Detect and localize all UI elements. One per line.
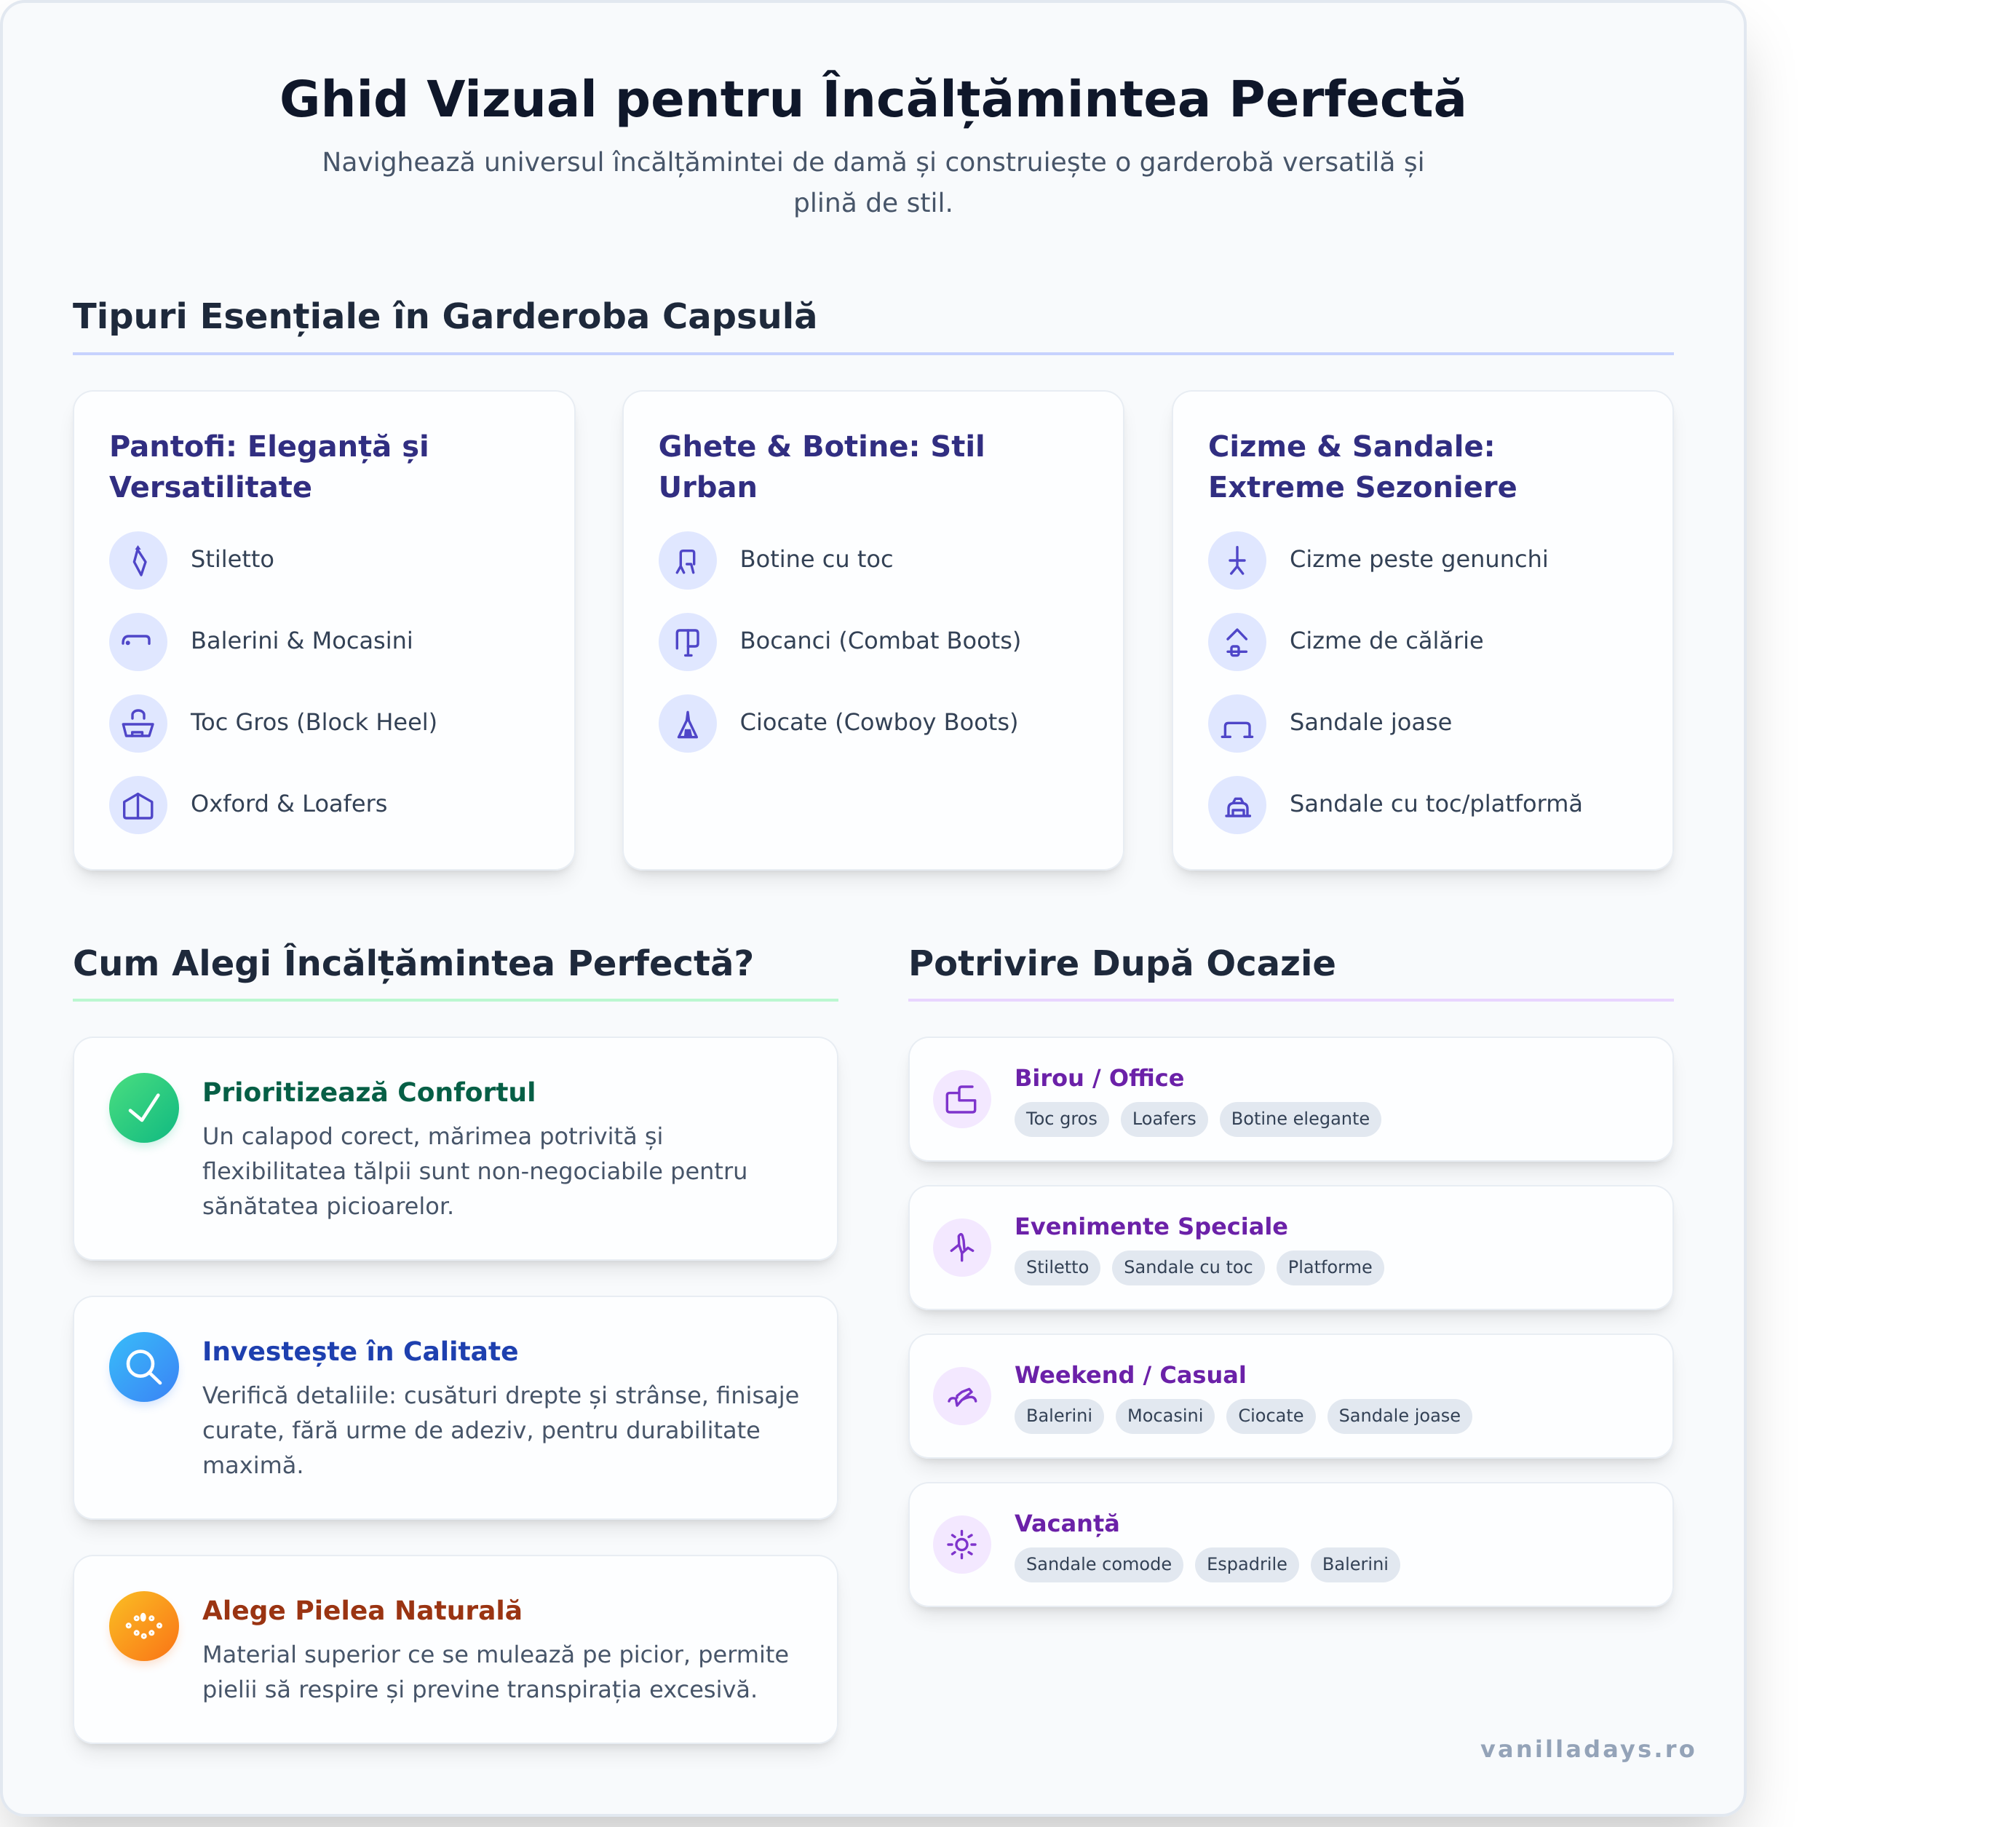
tags: Sandale comode: [1026, 1554, 1172, 1574]
tags: Loafers: [1132, 1109, 1196, 1129]
subtitle: plină de stil.: [793, 189, 953, 218]
tags: Espadrile: [1207, 1554, 1287, 1574]
tags: Sandale joase: [1339, 1406, 1461, 1426]
tags: Toc gros: [1026, 1109, 1098, 1129]
occasion heading: Weekend / Casual: [1015, 1361, 1247, 1389]
panel: ghete: [622, 390, 1124, 871]
icon: briefcase: [933, 1070, 991, 1128]
icon: sun: [933, 1515, 991, 1574]
tags: [1015, 1102, 1381, 1137]
tip text: maximă.: [202, 1451, 304, 1479]
list item: flat sandals: Sandale joase: [1290, 708, 1452, 736]
card heading: Pantofi: Eleganță și: [109, 430, 429, 464]
heading: essential types: Tipuri Esențiale în Garderoba Capsulă: [73, 296, 818, 337]
tags: Balerini: [1322, 1554, 1389, 1574]
footer: site name: vanilladays.ro: [1480, 1735, 1697, 1763]
tags: Botine elegante: [1231, 1109, 1370, 1129]
panel: office: [908, 1037, 1674, 1162]
list item: cowboy boots: Ciocate (Cowboy Boots): [740, 708, 1018, 736]
title: Ghid Vizual pentru Încălțămintea Perfectă: [279, 71, 1467, 129]
panel: vacation: [908, 1482, 1674, 1607]
tip heading: Investește în Calitate: [202, 1337, 519, 1367]
tip text: [202, 1382, 799, 1479]
icon: heeled shoe: [933, 1218, 991, 1277]
panel: comfort tip: [73, 1037, 838, 1261]
list item: oxford: Oxford & Loafers: [191, 790, 387, 817]
tip text: Un calapod corect, mărimea potrivită și: [202, 1122, 663, 1150]
card heading: Ghete & Botine: Stil: [659, 430, 985, 464]
icon: magnifier: [109, 1332, 179, 1402]
panel: pantofi: [73, 390, 576, 871]
list item: riding boots: [1208, 613, 1484, 671]
card heading: Urban: [659, 471, 758, 504]
list item: ballerinas: [109, 613, 413, 671]
panel: leather tip: [73, 1555, 838, 1744]
occasion heading: Birou / Office: [1015, 1064, 1184, 1092]
list item: riding boots: Cizme de călărie: [1290, 627, 1484, 654]
panel: weekend: [908, 1333, 1674, 1459]
list item: ballerinas: Balerini & Mocasini: [191, 627, 413, 654]
list item: heeled sandals: Sandale cu toc/platformă: [1290, 790, 1583, 817]
tip text: [202, 1641, 789, 1703]
tags: Mocasini: [1127, 1406, 1203, 1426]
tip text: flexibilitatea tălpii sunt non-negociabile pentru: [202, 1157, 747, 1185]
tags: Sandale cu toc: [1124, 1257, 1253, 1277]
list item: flat sandals: [1208, 694, 1452, 753]
tags: Stiletto: [1026, 1257, 1089, 1277]
panel: cizme: [1172, 390, 1674, 871]
occasion heading: Evenimente Speciale: [1015, 1213, 1288, 1240]
card heading: [109, 430, 429, 504]
tags: [1015, 1547, 1400, 1582]
card heading: Versatilitate: [109, 471, 312, 504]
list item: oxford: [109, 776, 387, 834]
subtitle: [322, 148, 1425, 218]
list item: heeled boots: [659, 531, 894, 590]
tip text: curate, fără urme de adeziv, pentru durabilitate: [202, 1416, 761, 1444]
tip heading: Alege Pielea Naturală: [202, 1596, 523, 1626]
tags: [1015, 1251, 1384, 1285]
list item: combat boots: Bocanci (Combat Boots): [740, 627, 1021, 654]
card heading: Extreme Sezoniere: [1208, 471, 1517, 504]
tags: Balerini: [1026, 1406, 1092, 1426]
list item: heeled sandals: [1208, 776, 1583, 834]
list item: cowboy boots: [659, 694, 1018, 753]
tags: Platforme: [1288, 1257, 1373, 1277]
card heading: Cizme & Sandale:: [1208, 430, 1496, 464]
tip text: pielii să respire și previne transpirația excesivă.: [202, 1676, 758, 1703]
heading: occasions: Potrivire După Ocazie: [908, 943, 1336, 984]
occasion heading: Vacanță: [1015, 1510, 1120, 1537]
tip text: [202, 1122, 747, 1220]
list item: block heel: [109, 694, 437, 753]
icon: dots: [109, 1591, 179, 1661]
list item: over knee boots: [1208, 531, 1549, 590]
list item: heeled boots: Botine cu toc: [740, 545, 894, 573]
tip heading: Prioritizează Confortul: [202, 1078, 536, 1108]
heading: how to choose: Cum Alegi Încălțămintea Perfectă?: [73, 943, 754, 984]
tip text: Verifică detaliile: cusături drepte și strânse, finisaje: [202, 1382, 799, 1409]
tags: Ciocate: [1238, 1406, 1304, 1426]
list item: stiletto: [109, 531, 274, 590]
tip text: sănătatea picioarelor.: [202, 1192, 454, 1220]
icon: check: [109, 1073, 179, 1143]
card heading: [659, 430, 985, 504]
list item: over knee boots: Cizme peste genunchi: [1290, 545, 1549, 573]
list item: combat boots: [659, 613, 1021, 671]
panel: special events: [908, 1185, 1674, 1310]
list item: block heel: Toc Gros (Block Heel): [191, 708, 437, 736]
tags: [1015, 1399, 1472, 1434]
panel: quality tip: [73, 1296, 838, 1520]
subtitle: Navighează universul încălțămintei de damă și construiește o garderobă versatilă și: [322, 148, 1425, 178]
list item: stiletto: Stiletto: [191, 545, 274, 573]
card heading: [1208, 430, 1517, 504]
icon: casual shoe: [933, 1367, 991, 1425]
tip text: Material superior ce se mulează pe picior, permite: [202, 1641, 789, 1668]
